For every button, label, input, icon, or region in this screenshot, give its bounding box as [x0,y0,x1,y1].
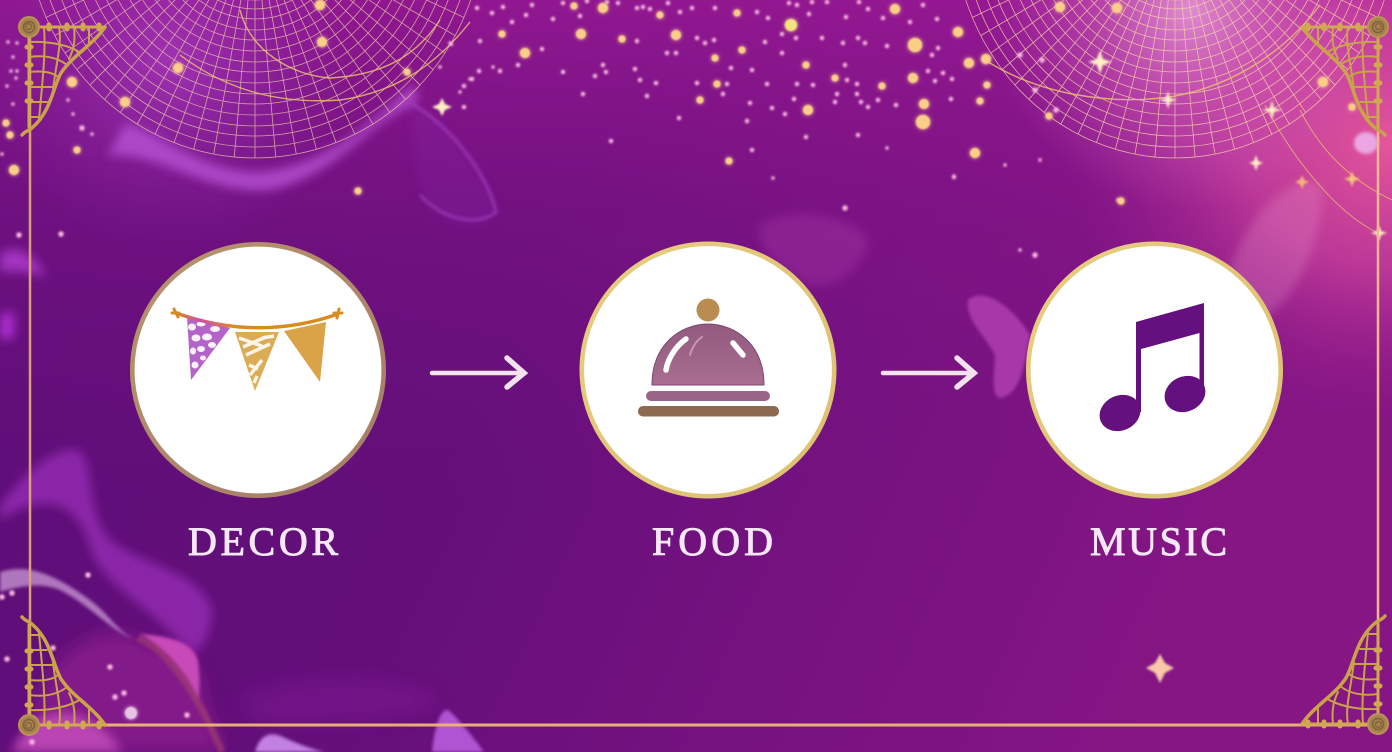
music circle [1028,244,1281,496]
food circle [582,244,834,496]
gold net cords [180,5,1392,233]
corner ornament: top right [1302,17,1388,135]
decor circle [132,244,384,496]
corner ornament: bottom left [19,617,105,735]
arrow: decor to food [432,358,524,387]
ribbons: left edge [0,249,212,655]
icon: cloche [638,298,779,416]
decorative net: top right [946,0,1392,160]
label: food: FOOD [652,519,773,564]
ribbons: faint centre and right [759,132,1378,398]
panel: music [1028,244,1281,496]
decorative net: top left [19,0,491,160]
gold dust: small dots [2,1,1118,742]
ribbons: bottom left [0,569,484,752]
corner ornament: top left [19,17,105,135]
panel: food [582,244,834,496]
label: decor: DECOR [188,519,338,564]
sparkle stars [432,50,1387,241]
corner ornament: bottom right [1302,616,1388,734]
panel: decor [132,244,384,496]
sparkle: bottom right [1146,654,1174,683]
icon: music notes [1094,303,1211,438]
icon: bunting [172,309,342,391]
ribbon: top left [104,85,496,223]
arrow: food to music [883,358,974,387]
label: music: MUSIC [1090,519,1227,564]
